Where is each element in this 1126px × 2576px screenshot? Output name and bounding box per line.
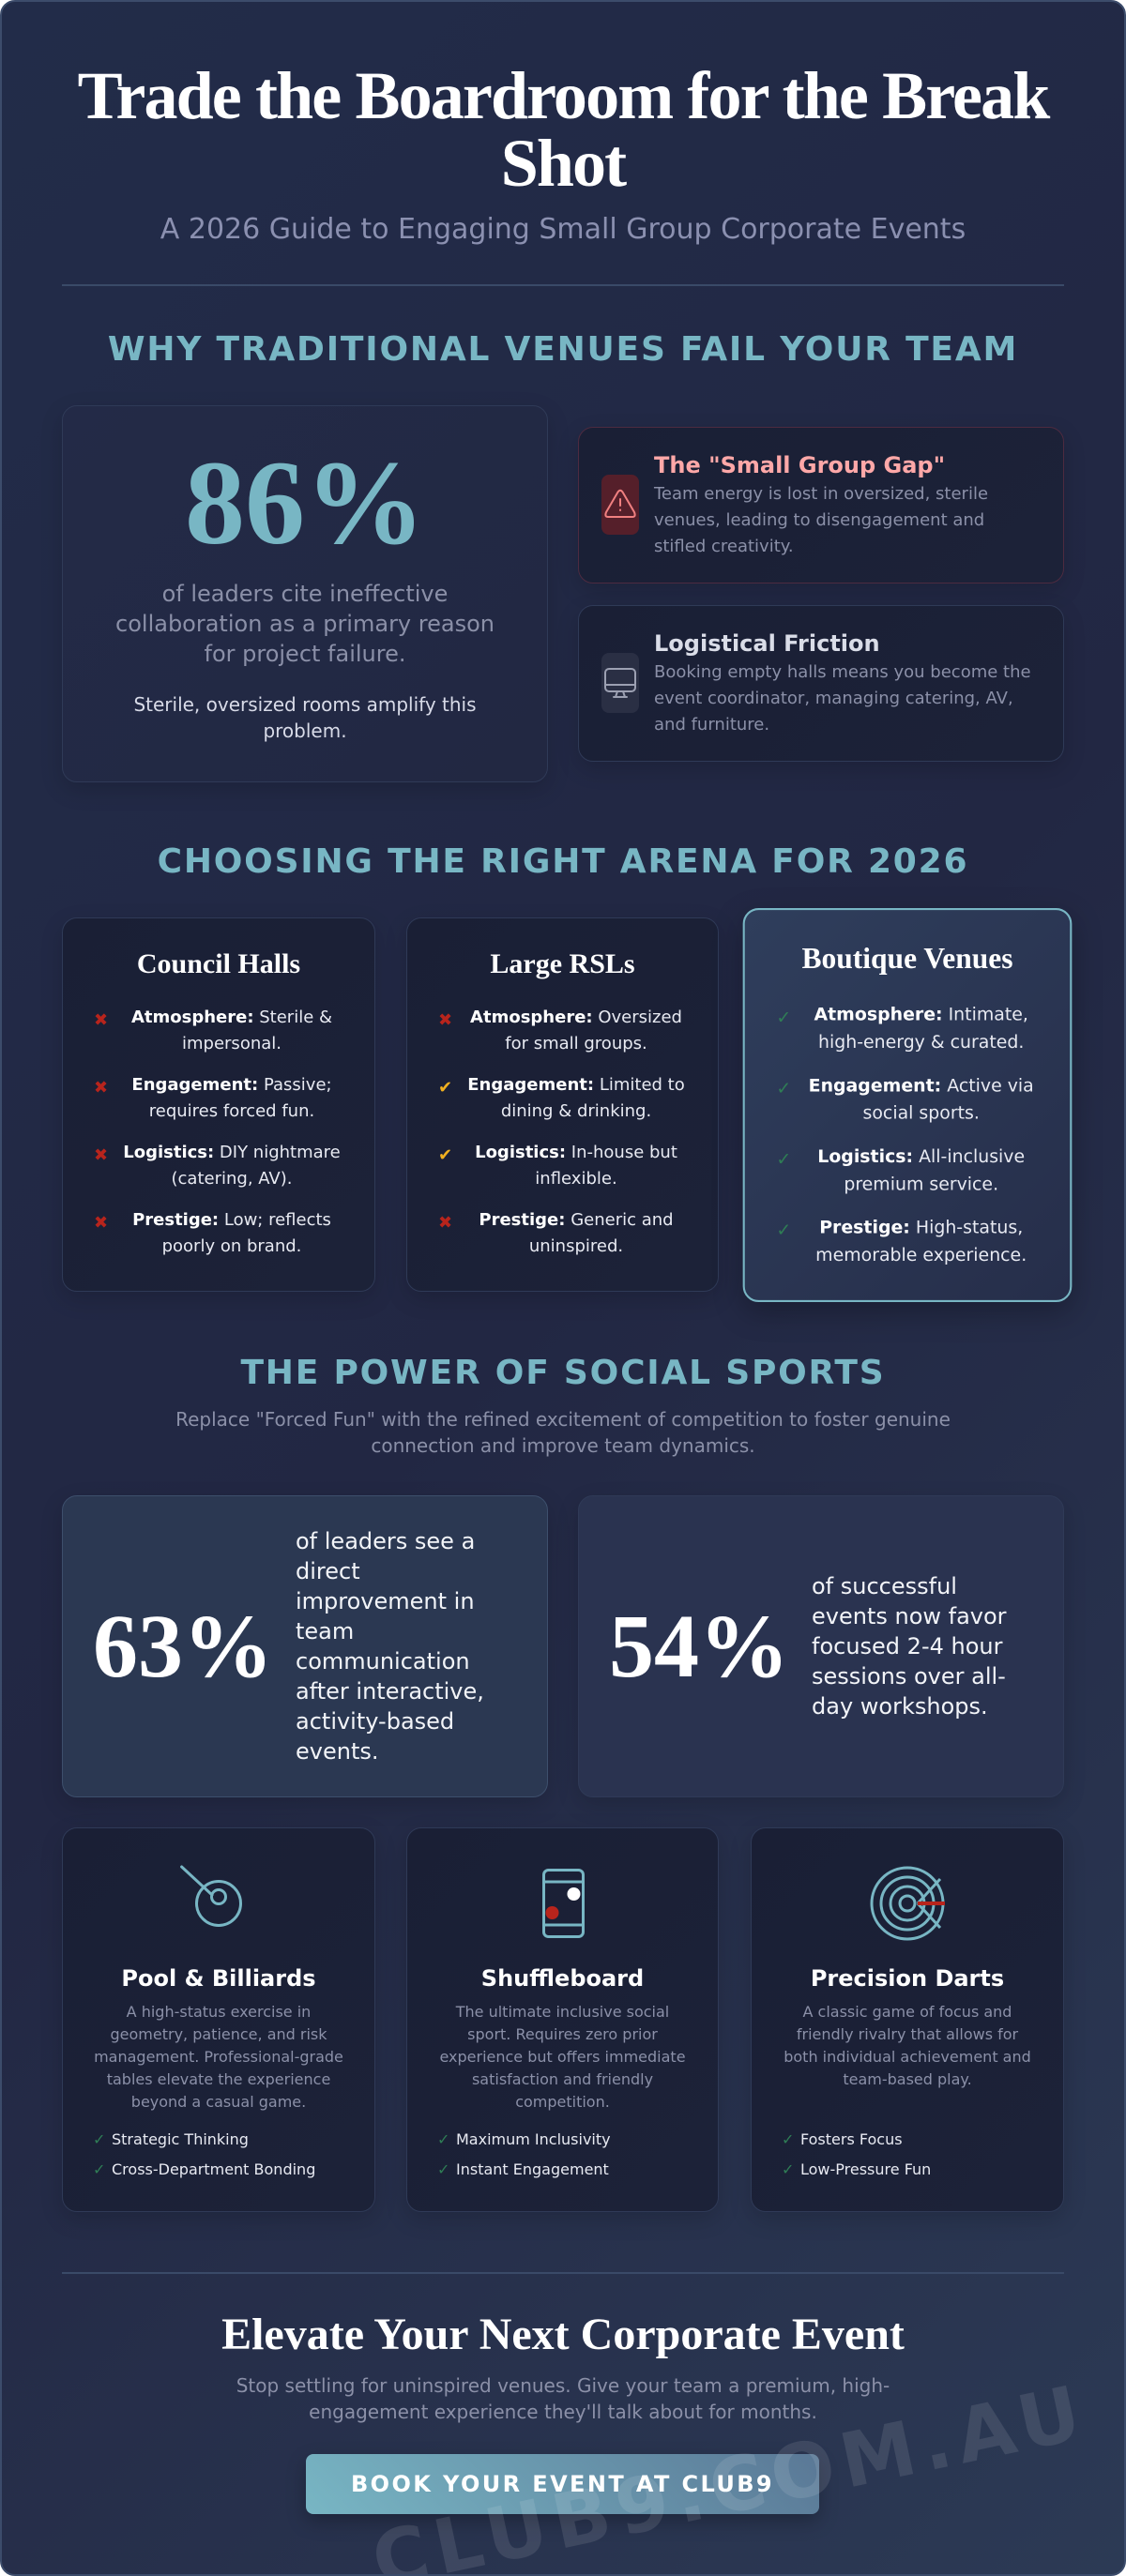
criteria rows: Engagement: Limited to dining & drinking. xyxy=(467,1075,685,1121)
benefits xyxy=(437,2130,611,2178)
game description: A classic game of focus and friendly rivalry that allows for both individual achievement and team-based play. xyxy=(784,2003,1031,2088)
call to action text xyxy=(236,2374,890,2423)
criteria rows: Logistics: In-house but inflexible. xyxy=(475,1143,677,1189)
panel: precision darts xyxy=(751,1827,1064,2212)
friction description: Booking empty halls means you become the xyxy=(654,662,1031,682)
gap description: Team energy is lost in oversized, sterile xyxy=(654,484,988,504)
heading: power of social sports: THE POWER OF SOCIAL SPORTS xyxy=(240,1354,886,1392)
venue title: Council Halls xyxy=(137,948,300,979)
panel: large RSLs xyxy=(406,917,719,1292)
criteria rows: Atmosphere: Intimate, high-energy & curated. xyxy=(814,1005,1028,1053)
benefits: Instant Engagement xyxy=(456,2160,609,2178)
friction description xyxy=(654,662,1031,735)
criteria rows: ✖ xyxy=(438,1010,452,1030)
panel: 63 percent stat xyxy=(62,1495,548,1797)
panel: 86 percent stat xyxy=(62,405,548,782)
stat note: Sterile, oversized rooms amplify this problem. xyxy=(133,693,477,742)
section intro: connection and improve team dynamics. xyxy=(371,1434,755,1457)
benefits xyxy=(782,2130,931,2178)
panel: shuffleboard xyxy=(406,1827,719,2212)
game title: Pool & Billiards xyxy=(121,1965,316,1992)
panel: logistical friction xyxy=(578,605,1064,762)
criteria rows: Prestige: Low; reflects poorly on brand. xyxy=(132,1210,331,1256)
benefits: Low-Pressure Fun xyxy=(800,2160,931,2178)
icon: shuffleboard court xyxy=(542,1869,585,1938)
subtitle: A 2026 Guide to Engaging Small Group Corporate Events xyxy=(160,213,966,246)
icon: cue and ball xyxy=(180,1865,242,1927)
stat description: of successful events now favor focused 2-4 hour sessions over all-day workshops. xyxy=(812,1573,1007,1720)
criteria rows: Atmosphere: Sterile & impersonal. xyxy=(131,1008,332,1053)
criteria rows: Logistics: All-inclusive premium service. xyxy=(817,1146,1025,1195)
stat description: of leaders cite ineffective collaboration as a primary reason for project failure. xyxy=(115,581,495,667)
stat number: 54% xyxy=(609,1596,789,1696)
criteria rows: ✓ xyxy=(776,1220,791,1241)
criteria rows: Prestige: High-status, memorable experience. xyxy=(815,1218,1027,1265)
benefits: ✓ xyxy=(437,2160,449,2178)
benefits: ✓ xyxy=(93,2160,105,2178)
benefits: ✓ xyxy=(437,2130,449,2148)
benefits: ✓ xyxy=(93,2130,105,2148)
criteria rows: Prestige: Generic and uninspired. xyxy=(479,1210,674,1256)
icon: dartboard xyxy=(871,1867,945,1940)
criteria rows: Atmosphere: Oversized for small groups. xyxy=(470,1008,682,1053)
section intro: Replace "Forced Fun" with the refined excitement of competition to foster genuine xyxy=(175,1408,951,1431)
title xyxy=(78,58,1051,201)
icon: monitor xyxy=(601,653,639,713)
heading: choosing the right arena: CHOOSING THE RIGHT ARENA FOR 2026 xyxy=(158,842,968,881)
venue title: Boutique Venues xyxy=(802,943,1012,975)
criteria rows: ✖ xyxy=(438,1213,452,1233)
button xyxy=(306,2454,819,2514)
criteria rows: ✔ xyxy=(438,1145,452,1165)
criteria rows: ✖ xyxy=(94,1078,108,1098)
panel: pool and billiards xyxy=(62,1827,375,2212)
benefits xyxy=(93,2130,315,2178)
heading: why traditional venues fail: WHY TRADITIONAL VENUES FAIL YOUR TEAM xyxy=(108,330,1018,369)
venue title: Large RSLs xyxy=(490,948,635,979)
game title: Shuffleboard xyxy=(481,1965,644,1992)
call to action text: Stop settling for uninspired venues. Give your team a premium, high- xyxy=(236,2374,890,2397)
stat description: of leaders see a direct improvement in team communication after interactive, activity-based events. xyxy=(296,1528,484,1765)
criteria rows: Logistics: DIY nightmare (catering, AV). xyxy=(123,1143,341,1189)
benefits: Strategic Thinking xyxy=(112,2130,249,2148)
call to action title: Elevate Your Next Corporate Event xyxy=(221,2310,905,2359)
icon: warning triangle xyxy=(601,475,639,535)
section intro xyxy=(175,1408,951,1457)
criteria rows xyxy=(776,1005,1034,1265)
gap description: venues, leading to disengagement and xyxy=(654,510,984,530)
button: BOOK YOUR EVENT AT CLUB9 xyxy=(351,2471,774,2497)
criteria rows: Engagement: Active via social sports. xyxy=(809,1075,1034,1124)
gap description: stifled creativity. xyxy=(654,537,794,556)
panel: boutique venues xyxy=(743,908,1072,1302)
criteria rows xyxy=(94,1008,341,1256)
criteria rows: Engagement: Passive; requires forced fun. xyxy=(131,1075,332,1121)
criteria rows: ✓ xyxy=(776,1079,791,1099)
friction title: Logistical Friction xyxy=(654,630,880,657)
criteria rows xyxy=(438,1008,685,1256)
benefits: ✓ xyxy=(782,2160,794,2178)
benefits: ✓ xyxy=(782,2130,794,2148)
criteria rows: ✓ xyxy=(776,1149,791,1170)
friction description: event coordinator, managing catering, AV, xyxy=(654,689,1013,708)
title: Shot xyxy=(501,126,625,201)
criteria rows: ✖ xyxy=(94,1010,108,1030)
panel: 54 percent stat xyxy=(578,1495,1064,1797)
friction description: and furniture. xyxy=(654,715,769,735)
game title: Precision Darts xyxy=(811,1965,1004,1992)
benefits: Cross-Department Bonding xyxy=(112,2160,315,2178)
game description: A high-status exercise in geometry, patience, and risk management. Professional-grade tables elevate the experience beyond a casual game. xyxy=(94,2003,343,2111)
criteria rows: ✖ xyxy=(94,1213,108,1233)
call to action text: engagement experience they'll talk about for months. xyxy=(309,2401,817,2423)
benefits: Maximum Inclusivity xyxy=(456,2130,611,2148)
criteria rows: ✓ xyxy=(776,1008,791,1028)
panel: council halls xyxy=(62,917,375,1292)
stat number: 63% xyxy=(93,1596,273,1696)
game description: The ultimate inclusive social sport. Requires zero prior experience but offers immediate satisfaction and friendly competition. xyxy=(439,2003,686,2111)
panel: small group gap xyxy=(578,427,1064,583)
title: Trade the Boardroom for the Break xyxy=(78,58,1048,133)
criteria rows: ✔ xyxy=(438,1078,452,1098)
gap description xyxy=(653,484,988,556)
criteria rows: ✖ xyxy=(94,1145,108,1165)
stat number: 86% xyxy=(185,436,425,569)
benefits: Fosters Focus xyxy=(800,2130,903,2148)
gap title: The "Small Group Gap" xyxy=(654,452,945,478)
